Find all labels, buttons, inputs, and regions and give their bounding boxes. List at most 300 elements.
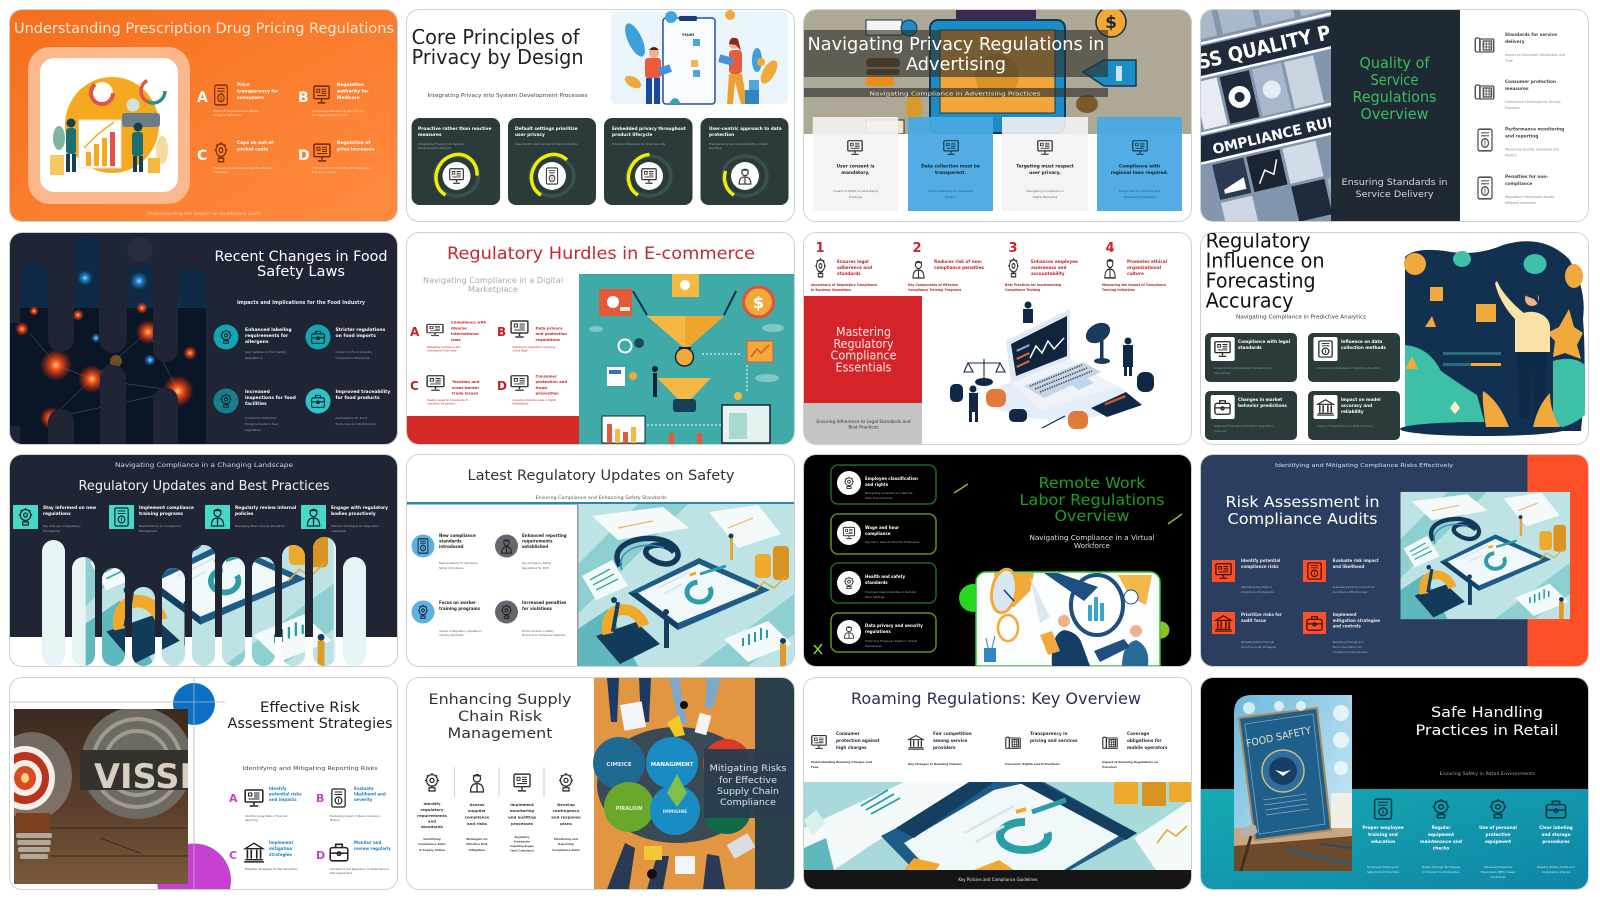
- subtitle: Workforce: [1074, 541, 1111, 550]
- item D: D: [298, 148, 310, 164]
- pill: health and safety: Employer Responsibilities in Remote: [865, 590, 916, 594]
- subtitle: Ensuring Compliance and Enhancing Safety Standards: [536, 495, 666, 500]
- item: coverage: obligations for: [1127, 738, 1163, 742]
- column: data collection: Data collection must be: [921, 164, 980, 170]
- item: inspections: Legislation: [245, 428, 261, 432]
- column: targeting: user privacy.: [1029, 170, 1061, 176]
- panel: regulatory compliance essentials slide: [804, 232, 1191, 444]
- column: protective equipment: Use of personal: [1479, 824, 1517, 830]
- panel: safe handling slide: [1201, 678, 1588, 888]
- pill: employee classification: Employee classification: [865, 476, 918, 481]
- callout: mitigating risks: Compliance: [720, 798, 776, 808]
- card: model accuracy: [1308, 390, 1400, 440]
- item C: C: [229, 848, 237, 862]
- subtitle: Navigating Compliance in a Digital: [423, 276, 563, 284]
- column: user consent: mandatory.: [841, 170, 870, 176]
- card: user-centric approach: protection: [709, 132, 734, 138]
- title: Chain Risk: [458, 708, 543, 724]
- column: data collection: transparent.: [935, 170, 966, 176]
- column: protective equipment: Personal Protective: [1484, 864, 1512, 868]
- panel: risk assessment strategies slide: [10, 678, 397, 888]
- item: identify risks: compliance risks: [1241, 564, 1279, 569]
- column: data collection: CCPA: A New Era for Consumer: [928, 189, 974, 193]
- item 3: [1005, 240, 1078, 292]
- subtitle: Navigating Compliance in a Virtual: [1030, 533, 1154, 542]
- callout: mitigating risks: [704, 748, 794, 818]
- subtitle band: [804, 88, 1108, 98]
- title: Privacy by Design: [412, 45, 584, 69]
- card: legal standards: Compliance with legal: [1238, 338, 1291, 344]
- item C: mitigation: [269, 846, 292, 850]
- column: data collection: [908, 117, 993, 211]
- item B: Comparing International Drug Pricing: [312, 109, 364, 113]
- item: new standards: [412, 533, 478, 570]
- item: prioritize risks: [1212, 612, 1282, 649]
- illustration: two people with clipboard: [611, 10, 788, 104]
- column: protective equipment: equipment: [1485, 838, 1511, 844]
- illustration: two people with clipboard: YSUIH: [681, 33, 694, 37]
- item: engage bodies: Adaptation: [331, 529, 347, 533]
- item 4: Training Initiatives: [1102, 288, 1135, 292]
- item C: Taxation and: [452, 378, 480, 384]
- item: identify risks: [1212, 558, 1281, 594]
- item: stay informed: Key Changes in Regulatory: [43, 524, 81, 528]
- illustration: isometric documents: [578, 504, 794, 666]
- item A: Impact of Regulations on Patient: [213, 109, 259, 113]
- pill: wage and hour: compliance: [865, 531, 891, 536]
- item: review policies: Regularly review internal: [235, 505, 297, 511]
- title: Safety Laws: [257, 264, 345, 280]
- item: increased penalties: for violations: [522, 606, 553, 611]
- title band: Advertising: [906, 54, 1006, 75]
- item C: pocket costs: [237, 146, 269, 152]
- title: Understanding Prescription Drug Pricing Regulations: [14, 21, 394, 37]
- item 4: Measuring the Impact of Compliance: [1102, 282, 1166, 286]
- illustration: food safety book and gavel: [1234, 694, 1352, 870]
- column: regional laws: regional laws required.: [1111, 170, 1169, 176]
- subtitle: [423, 276, 563, 294]
- pill: data privacy: regulations: [865, 629, 891, 634]
- title: [1352, 54, 1437, 123]
- column: implement monitoring: Frameworks: [514, 840, 531, 843]
- column: implement monitoring: Implement: [510, 802, 534, 806]
- column: equipment maintenance: Proper Storage Techniques: [1422, 864, 1461, 868]
- item D: Pricing Dynamics: [312, 170, 337, 174]
- item: consumer protection: Consumer: [836, 730, 861, 736]
- item D: [497, 373, 567, 405]
- item B: Strategies and Outcomes: [312, 113, 348, 117]
- item: mitigation strategies: and controls: [1333, 624, 1361, 628]
- item: inspections: Consumer Protection: [245, 416, 277, 420]
- column: equipment maintenance: checks: [1433, 845, 1450, 851]
- column: implement monitoring: Impacting Supply: [510, 844, 534, 848]
- item: penalties: [1478, 174, 1554, 205]
- panel: e-commerce hurdles slide: [407, 232, 794, 444]
- item 1: in Business Operations: [811, 288, 851, 292]
- column: contingency plans: Reporting: [558, 842, 574, 846]
- card: market behavior: Changes: [1214, 428, 1227, 432]
- item B: B: [497, 324, 506, 338]
- item: penalties: Regulatory Frameworks Across: [1505, 195, 1554, 199]
- item: coverage: [1102, 730, 1168, 768]
- photo: compliance tiles: [1158, 0, 1404, 242]
- photo: compliance tiles: OMPLIANCE RULE: [1211, 112, 1347, 158]
- item C: cross-border: [452, 384, 479, 390]
- illustration: remote worker and clock: [959, 567, 1170, 666]
- background illustration: tablet and props: [804, 7, 1191, 221]
- column: identify requirements: and: [428, 818, 436, 823]
- column: clear labeling: and storage: [1541, 832, 1571, 838]
- item: allergen labeling: Regulations: [245, 356, 263, 360]
- item: imports: [306, 324, 386, 360]
- title: [1020, 474, 1165, 525]
- item B: [298, 82, 369, 117]
- item A: Reporting: [245, 818, 258, 822]
- item: review policies: [205, 505, 297, 529]
- photo: team around strategy table: MANAGIMENT: [651, 762, 694, 768]
- item 2: 2: [912, 240, 922, 256]
- red title panel: Essentials: [836, 360, 892, 374]
- item: enhanced reporting: established: [522, 544, 548, 549]
- item: imports: on food imports: [336, 332, 376, 338]
- column: targeting: Digital Marketing: [1033, 195, 1058, 199]
- callout: mitigating risks: Mitigating Risks: [710, 764, 787, 774]
- item 2: Reduces risk of non-: [934, 258, 983, 264]
- card: user-centric approach: User-centric approach to data: [709, 126, 782, 132]
- item 3: accountability: [1031, 270, 1065, 276]
- item B: [316, 786, 386, 822]
- item B: B: [316, 792, 324, 804]
- red title panel: Mastering: [836, 324, 891, 338]
- item A: [229, 786, 302, 822]
- item 2: [908, 240, 985, 292]
- background illustration: tablet and props: $: [1105, 13, 1117, 33]
- title: Latest Regulatory Updates on Safety: [468, 468, 735, 484]
- pill: health and safety: [831, 563, 936, 603]
- item: inspections: inspections for food: [245, 394, 296, 400]
- item: traceability: [306, 388, 390, 426]
- item: service delivery: Trust: [1504, 59, 1513, 63]
- item: consumer protection: Understanding Roaming Charges and: [811, 760, 872, 764]
- item A: diverse: [451, 325, 467, 330]
- item B: severity: [354, 796, 373, 802]
- item A: and impacts: [269, 796, 297, 802]
- item: stay informed: Frameworks: [43, 529, 60, 533]
- item: increased penalties: Protocols for Hazardous Materials: [522, 633, 566, 637]
- subtitle: Navigating Compliance in Predictive Analytics: [1236, 314, 1366, 320]
- red band: [407, 416, 579, 444]
- item 2: Compliance Training Programs: [908, 288, 961, 292]
- column: contingency plans: Monitoring and: [554, 836, 578, 840]
- item: evaluate impact: Compliance Effectiveness: [1333, 590, 1368, 594]
- item 4: organizational: [1127, 264, 1162, 270]
- item 1: 1: [815, 240, 825, 256]
- item: consumer protection: Compliance Challenges for Service: [1505, 100, 1561, 104]
- item: worker training: [412, 600, 482, 637]
- item C: Taxation Issues for Cross-Border E-: [427, 398, 469, 402]
- item: evaluate impact: [1303, 558, 1379, 594]
- item A: Navigating Compliance with: [427, 346, 461, 348]
- item A: [197, 82, 279, 117]
- item B: [497, 320, 567, 352]
- item: fair competition: [908, 730, 972, 766]
- item A: Identifying Key Risks in Financial: [245, 814, 288, 818]
- column: identify requirements: [417, 773, 447, 852]
- item: identify risks: Identify potential: [1241, 558, 1281, 563]
- item A: potential risks: [269, 791, 302, 796]
- item 3: awareness and: [1031, 264, 1066, 270]
- column: employee training: [1362, 799, 1404, 874]
- item: prioritize risks: Proactive Audit Strategies: [1241, 645, 1277, 649]
- card: default settings: User-Centric Approaches to Data Protection: [515, 142, 578, 146]
- item: engage bodies: [301, 505, 388, 533]
- item: service delivery: Impact on Consumer Satisfaction and: [1505, 53, 1565, 57]
- pill: health and safety: standards: [865, 580, 888, 585]
- column: clear labeling: [1537, 801, 1575, 874]
- item: consumer protection: measures: [1505, 86, 1529, 92]
- panel: compliance audit risk slide: [1201, 455, 1588, 666]
- item 3: 3: [1008, 240, 1018, 256]
- card: legal standards: Understanding Regulatory Frameworks in: [1214, 366, 1272, 370]
- card: embedded privacy: product lifecycle: [612, 132, 652, 138]
- title: Overview: [1054, 507, 1130, 525]
- pill: data privacy: [831, 613, 936, 652]
- item: transparency: [1005, 730, 1078, 766]
- panel: roaming regulations slide: [804, 678, 1191, 888]
- title: Quality of: [1360, 54, 1430, 72]
- item B: likelihood and: [354, 791, 386, 796]
- item: consumer protection: Fees: [811, 764, 819, 768]
- item A: transparency for: [237, 88, 279, 94]
- column: assess supplier: Assess: [470, 802, 485, 806]
- pill: health and safety: Health and safety: [865, 574, 906, 579]
- card: model accuracy: reliability: [1341, 408, 1364, 414]
- illustration: zoomed isometric documents: [804, 782, 1191, 870]
- card: data collection: Influence on data: [1341, 338, 1382, 344]
- item C: [229, 840, 298, 870]
- column: assess supplier: compliance: [465, 814, 490, 819]
- subtitle: Identifying and Mitigating Reporting Risks: [242, 766, 378, 772]
- item A: Identify: [269, 786, 287, 790]
- title: Labor Regulations: [1020, 491, 1165, 509]
- title: [1206, 228, 1325, 312]
- title: Regulatory Updates and Best Practices: [78, 478, 330, 494]
- item: consumer protection: [1475, 79, 1561, 110]
- item: fair competition: Key Changes in Roaming Policies: [908, 762, 962, 766]
- column: assess supplier: Strategies for: [466, 836, 489, 840]
- item: training: Implement compliance: [139, 505, 194, 511]
- item: traceability: Improved traceability: [336, 388, 390, 394]
- illustration: isometric documents in capsule columns: [42, 537, 366, 666]
- item: imports: Compliance Standards: [336, 356, 370, 360]
- item D: [316, 840, 391, 874]
- item D: price increases: [337, 146, 375, 152]
- column: targeting: Navigating Compliance in: [1026, 189, 1064, 193]
- item D: Risk Assessment: [330, 870, 352, 874]
- item: fair competition: among service: [933, 738, 968, 742]
- item: evaluate impact: Evaluate risk impact: [1333, 558, 1379, 563]
- column: clear labeling: Regular Safety Audits and: [1537, 864, 1575, 868]
- item A: Price: [237, 82, 249, 88]
- item B: authority for: [337, 88, 369, 94]
- title: [428, 692, 572, 742]
- item 4: [1102, 240, 1168, 292]
- item B: B: [298, 90, 309, 106]
- item D: [298, 140, 375, 174]
- item: allergen labeling: requirements for: [245, 332, 289, 338]
- item: new standards: introduced: [439, 544, 464, 549]
- column: contingency plans: and response: [551, 814, 581, 819]
- pill: employee classification: [831, 465, 936, 504]
- column: regional laws: [1097, 117, 1182, 211]
- card: market behavior: [1205, 390, 1297, 440]
- subtitle: Identifying and Mitigating Compliance Risks Effectively: [1275, 463, 1454, 469]
- item: engage bodies: bodies proactively: [331, 511, 376, 517]
- item 4: 4: [1105, 240, 1115, 256]
- item B: Making: [330, 818, 340, 822]
- panel: regulatory updates slide: [10, 455, 397, 666]
- card: embedded privacy: Embedded privacy throughout: [612, 126, 686, 132]
- column: user consent: [813, 117, 898, 211]
- column: identify requirements: in Supply Chains: [419, 848, 445, 852]
- item A: laws: [451, 336, 461, 342]
- item: training: Best Practices for Compliance: [139, 524, 181, 528]
- column: implement monitoring: monitoring: [510, 808, 534, 812]
- column: employee training: Employee Training for: [1367, 864, 1400, 868]
- item: training: Management: [139, 529, 158, 533]
- item 4: Promotes ethical: [1127, 258, 1168, 264]
- grey subtitle panel: [804, 402, 922, 444]
- item D: The Role of Pharmacy Benefit Managers in: [311, 166, 372, 170]
- item: coverage: Impact of Roaming Regulations on: [1102, 760, 1158, 764]
- item D: Monitor and: [354, 840, 382, 844]
- red title panel: Compliance: [830, 348, 896, 362]
- card: legal standards: Forecasting: [1214, 370, 1230, 374]
- item D: Marketplaces: [512, 402, 529, 405]
- red title panel: Regulatory: [834, 336, 894, 350]
- item: transparency: Transparency in: [1030, 730, 1068, 736]
- pill: wage and hour: Key Labor Laws for Remote Employees: [865, 540, 920, 544]
- column: protective equipment: [1479, 799, 1517, 878]
- photo: team around strategy table: PIRALOIN: [616, 806, 642, 812]
- item: service delivery: Standards for service: [1505, 32, 1557, 38]
- card: market behavior: behavior predictions: [1238, 402, 1287, 408]
- item: stay informed: regulations: [43, 511, 71, 517]
- title: [412, 25, 584, 69]
- title: [1226, 493, 1380, 528]
- panel: remote work regulations slide: [804, 455, 1191, 666]
- card: model accuracy: Impact on model: [1341, 396, 1381, 402]
- column: identify requirements: Identify: [423, 800, 441, 806]
- item: training: training programs: [139, 511, 183, 517]
- title: Core Principles of: [412, 25, 581, 49]
- item D: prevention: [536, 390, 559, 395]
- item: identify risks: Compliance Frameworks: [1241, 590, 1275, 594]
- item C: [410, 375, 480, 405]
- title: [214, 248, 388, 280]
- item B: Online Retail: [512, 349, 528, 352]
- column: protective equipment: Guidelines: [1490, 874, 1506, 878]
- item A: A: [229, 792, 238, 804]
- illustration: funnel on teal: $: [753, 292, 764, 312]
- item: stay informed: [13, 505, 96, 533]
- column: contingency plans: [551, 773, 581, 852]
- item A: A: [410, 324, 420, 338]
- item: mitigation strategies: Recommendations for: [1333, 645, 1363, 649]
- footer bar: Key Policies and Compliance Guidelines: [958, 876, 1038, 882]
- pill: employee classification: Work Environments: [865, 496, 893, 500]
- column: assess supplier: Mitigation: [469, 848, 485, 852]
- photo: team around strategy table: IMMIGINE: [663, 808, 687, 814]
- subtitle: Marketplace: [468, 284, 518, 294]
- photo: network of glowing nodes in capsule windows: [0, 202, 206, 444]
- item 2: Key Components of Effective: [908, 282, 958, 286]
- panel: privacy by design slide: [407, 10, 794, 221]
- item: service delivery: delivery: [1505, 39, 1525, 45]
- card: model accuracy: Impact of Regulations on Data Accuracy: [1317, 424, 1373, 428]
- column: implement monitoring: Chain Compliance: [510, 849, 534, 852]
- column: implement monitoring: processes: [511, 820, 534, 826]
- item B: and protection: [536, 330, 567, 336]
- center panel: [1331, 10, 1460, 221]
- card: market behavior: Changes in market: [1238, 396, 1282, 402]
- item: performance monitoring: Metrics: [1505, 154, 1517, 158]
- column: implement monitoring: and auditing: [508, 814, 536, 819]
- subtitle: Impacts and Implications for the Food Industry: [237, 300, 366, 306]
- item D: review regularly: [354, 846, 391, 850]
- item B: Evaluating Impact of Risks on Decision: [330, 814, 381, 818]
- column: employee training: Safe Product Handling: [1367, 870, 1399, 874]
- item: training: [109, 505, 194, 533]
- item: inspections: [214, 388, 296, 432]
- column: employee training: education: [1371, 838, 1395, 844]
- item: increased penalties: [495, 600, 567, 637]
- title: Safe Handling: [1431, 704, 1543, 720]
- item A: international: [451, 330, 479, 336]
- item: stay informed: Stay informed on new: [43, 505, 96, 511]
- panel: supply chain risk slide: [407, 678, 794, 888]
- card: data collection: collection methods: [1341, 344, 1386, 350]
- item: penalties: compliance: [1505, 181, 1533, 187]
- panel: quality of service slide: [1201, 10, 1588, 221]
- column: contingency plans: Compliance Risks: [552, 848, 580, 852]
- pill: employee classification: Navigating Compliance in Remote: [865, 491, 913, 495]
- item C: C: [410, 378, 419, 392]
- column: regional laws: Advertising Strategies: [1123, 195, 1156, 199]
- item: allergen labeling: allergens: [245, 338, 269, 344]
- pill: data privacy: Protecting Employee Rights in Virtual: [865, 639, 917, 643]
- column: employee training: training and: [1368, 832, 1398, 838]
- item: performance monitoring: [1478, 126, 1564, 158]
- footer bar: [804, 870, 1191, 888]
- item: increased penalties: Enhancements in Safety: [522, 629, 554, 633]
- column: assess supplier: and risks: [467, 820, 488, 826]
- item: traceability: Implications for Food: [336, 416, 367, 420]
- item: inspections: Enhancements in New: [245, 422, 279, 426]
- item C: Caps on out-of-: [237, 140, 275, 146]
- card: embedded privacy: Proactive Measures for Data Security: [612, 142, 666, 146]
- card: legal standards: standards: [1238, 344, 1262, 350]
- column: employee training: Proper employee: [1362, 824, 1404, 830]
- item A: [410, 319, 487, 352]
- item: coverage: Coverage: [1127, 730, 1149, 736]
- column: contingency plans: plans: [560, 820, 573, 826]
- title: Enhancing Supply: [428, 692, 572, 708]
- photo: light bulb and vision sign: [14, 709, 188, 884]
- item D: Consumer Protection Laws in Digital: [512, 398, 556, 402]
- card: proactive measures: Proactive rather than reactive: [418, 126, 491, 132]
- column: contingency plans: Develop: [557, 802, 575, 806]
